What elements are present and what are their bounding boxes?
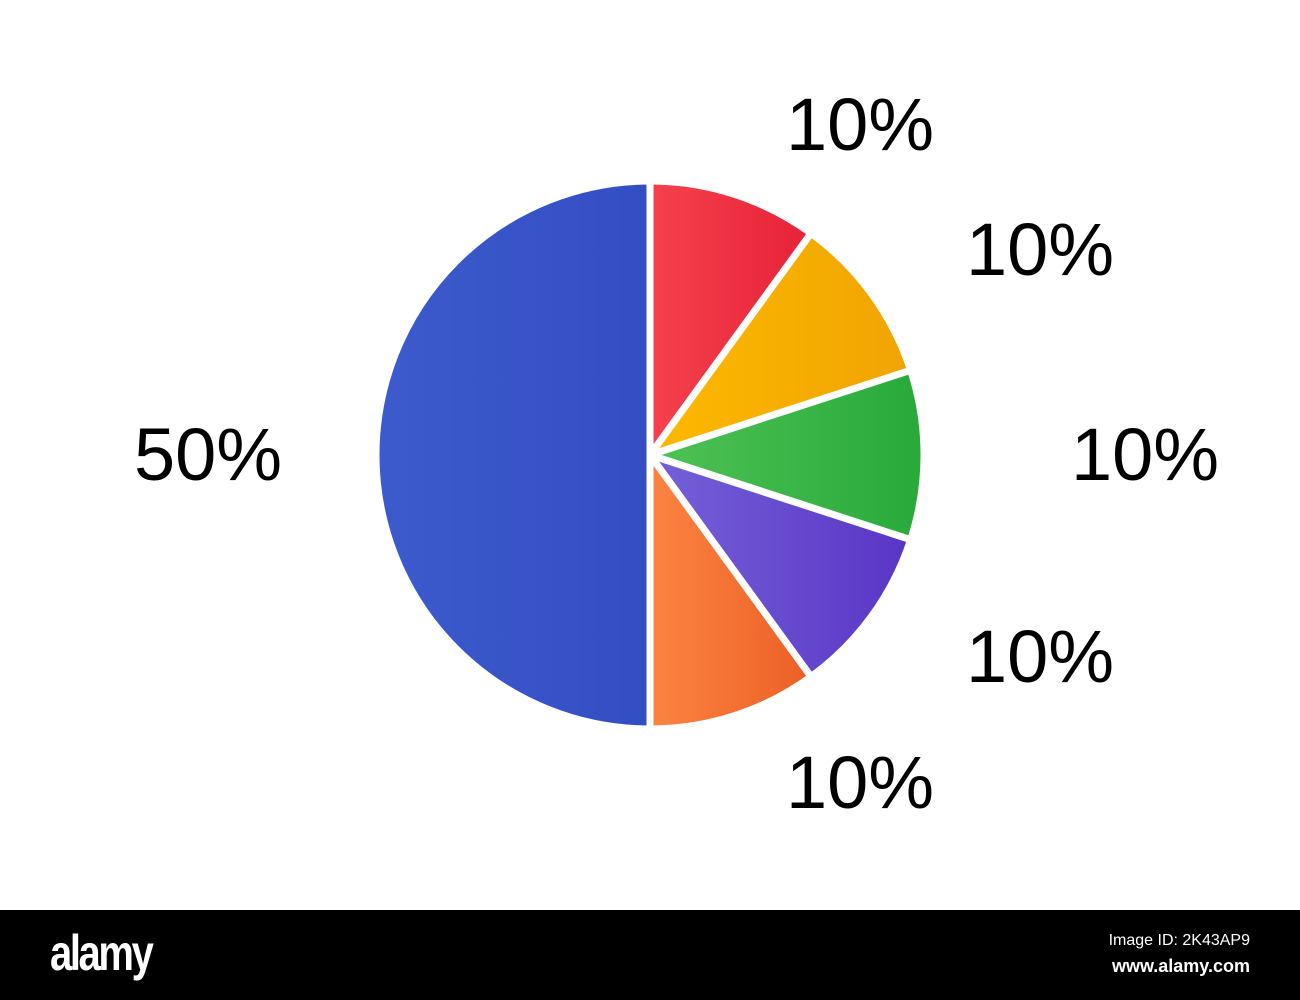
label 50%: 50% — [134, 413, 282, 496]
slice: green — [650, 370, 924, 540]
slice: red — [650, 181, 811, 455]
label green 10%: 10% — [1071, 413, 1219, 496]
alamy logo: alamy — [50, 925, 151, 981]
slice: orange — [650, 455, 811, 729]
website: www.alamy.com — [1112, 956, 1250, 976]
slice: purple — [650, 455, 911, 677]
label red 10%: 10% — [786, 83, 934, 166]
slice: blue 50% — [376, 181, 650, 729]
footer bar — [0, 910, 1300, 1000]
label yellow 10%: 10% — [966, 208, 1114, 291]
label orange 10%: 10% — [786, 741, 934, 824]
label purple 10%: 10% — [966, 615, 1114, 698]
slice: yellow — [650, 233, 911, 455]
image id: Image ID: 2K43AP9 — [1109, 932, 1250, 949]
